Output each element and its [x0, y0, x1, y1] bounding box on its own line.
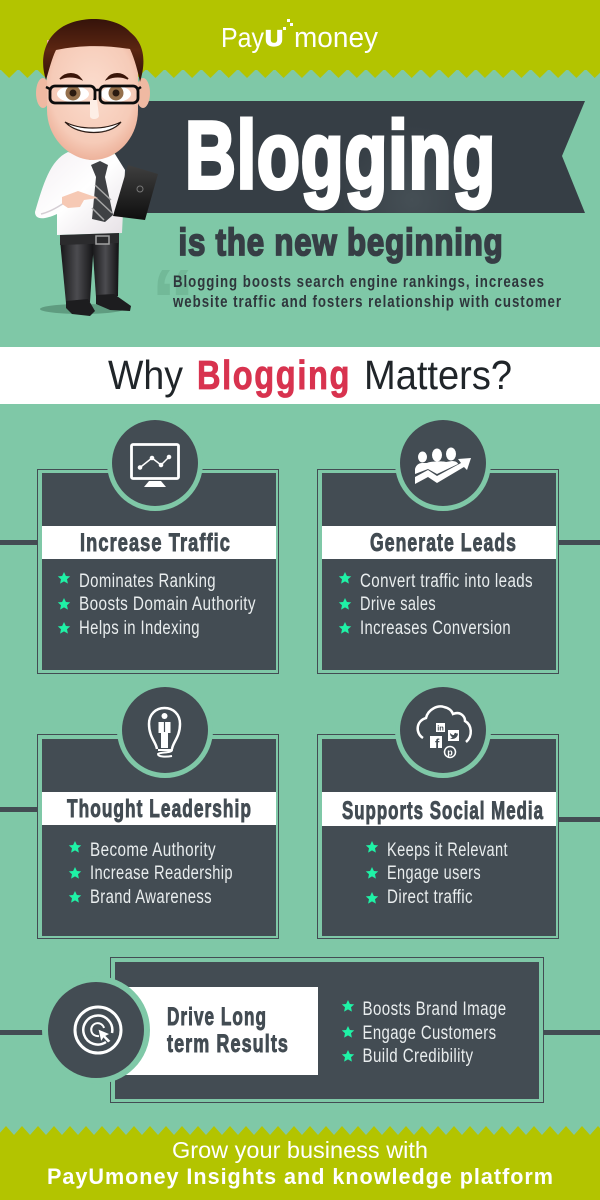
subtitle: is the new beginning [178, 222, 504, 264]
bullet list: Direct traffic [387, 887, 473, 908]
panel: Supports Social Media [318, 682, 558, 938]
title banner ribbon [115, 101, 585, 213]
bullet list [342, 999, 506, 1067]
bullet list: Become Authority [90, 840, 216, 861]
heading: Drive Long term Results [167, 1003, 289, 1058]
panel: Drive Long term Results [42, 958, 544, 1102]
logo: PayUmoney [221, 19, 378, 54]
footer text: PayUmoney Insights and knowledge platform [47, 1164, 554, 1189]
panel: Thought Leadership [38, 682, 278, 938]
icon: leads arrow [415, 448, 471, 484]
icon: target cursor [75, 1007, 121, 1053]
footer text: Grow your business with [172, 1137, 428, 1163]
heading: Matters? [364, 352, 512, 398]
icon: social cloud: in [437, 724, 444, 732]
footer text [47, 1137, 554, 1189]
bullet list: Keeps it Relevant [387, 840, 508, 861]
icon: social cloud [418, 706, 471, 758]
bullet list [366, 840, 508, 908]
heading: Generate Leads: Generate Leads [370, 529, 517, 557]
header band [0, 0, 600, 79]
icon: light bulb person [149, 708, 180, 757]
character illustration [35, 19, 158, 316]
bullet list: Boosts Brand Image [362, 999, 506, 1020]
heading [108, 352, 512, 398]
logo: PayUmoney: Pay [221, 22, 264, 53]
connectors [0, 540, 600, 1035]
heading: Thought Leadership: Thought Leadership [67, 795, 252, 823]
logo: PayUmoney: money [294, 22, 378, 54]
heading: Drive Long term Results: term Results [167, 1030, 289, 1058]
bullet list: Engage users [387, 863, 481, 884]
bullet list [339, 571, 533, 639]
bullet list [69, 840, 233, 908]
title: Blogging: Blogging [185, 102, 496, 209]
icon: monitor chart [132, 444, 178, 487]
footer band [0, 1126, 600, 1200]
icon: social cloud: p [447, 748, 453, 758]
heading: Increase Traffic: Increase Traffic [80, 529, 231, 557]
bullet list: Boosts Domain Authority [79, 594, 256, 615]
logo: PayUmoney: U [265, 26, 283, 51]
bullet list: Brand Awareness [90, 887, 212, 908]
heading: Blogging [197, 352, 351, 398]
bullet list: Helps in Indexing [79, 618, 200, 639]
bullet list: Dominates Ranking [79, 571, 216, 592]
bullet list: Drive sales [360, 594, 436, 615]
band: Why Blogging Matters? [0, 347, 600, 404]
intro text [172, 273, 562, 311]
bullet list: Engage Customers [362, 1023, 496, 1044]
quote mark: “ [151, 251, 195, 350]
bullet list: Increase Readership [90, 863, 233, 884]
bullet list: Increases Conversion [360, 618, 511, 639]
heading: Drive Long term Results: Drive Long [167, 1003, 267, 1031]
panel: Increase Traffic [38, 415, 278, 674]
bullet list: Build Credibility [362, 1046, 474, 1067]
bullet list [58, 571, 256, 639]
bullet list: Convert traffic into leads [360, 571, 533, 592]
heading: Why [108, 352, 183, 398]
panel: Generate Leads [318, 415, 558, 674]
icon: social cloud: f [435, 736, 440, 751]
